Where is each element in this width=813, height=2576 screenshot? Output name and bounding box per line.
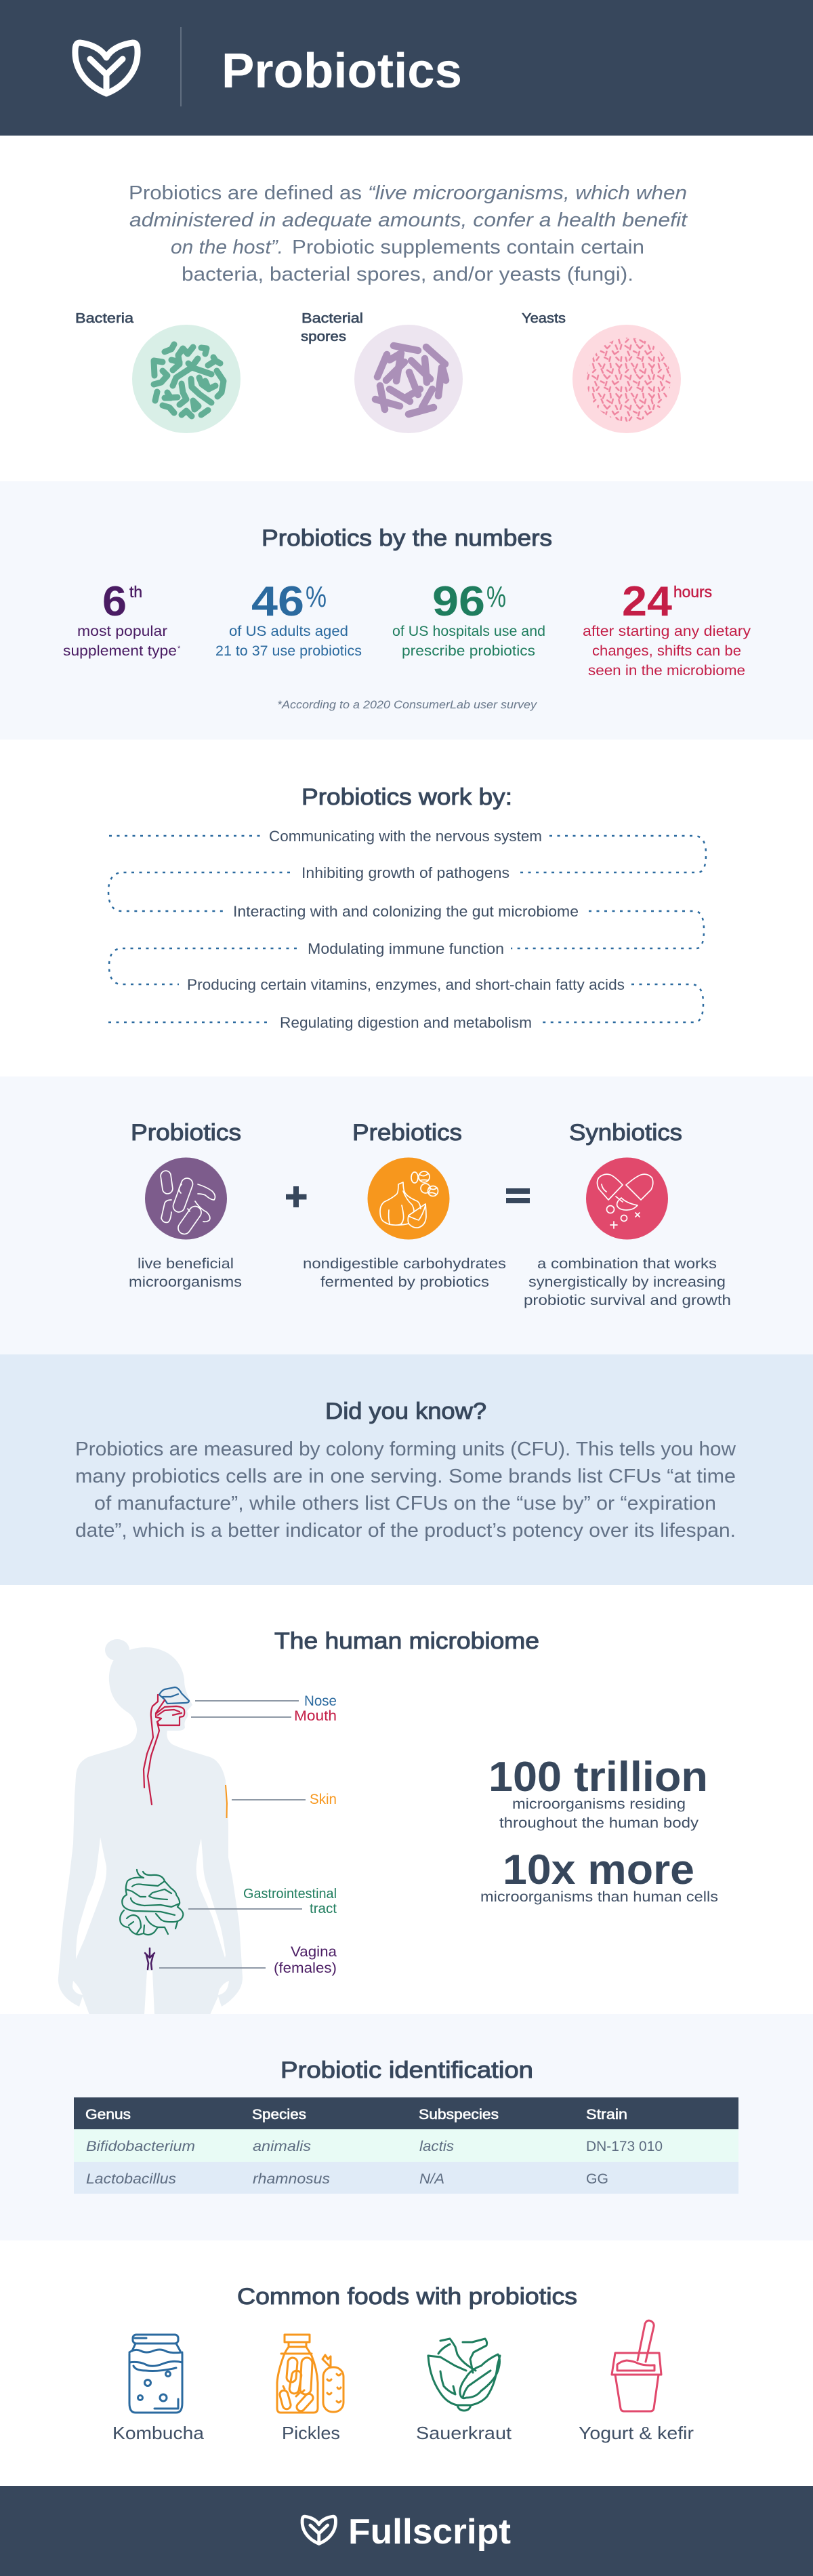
icon: bacterial spores circle	[354, 325, 463, 433]
table row: Bifidobacterium: animalis	[253, 2139, 312, 2154]
panel: header banner	[0, 0, 813, 136]
stat: 46%: 21 to 37 use probiotics	[215, 643, 362, 659]
stat: 46%: 46	[251, 578, 304, 625]
body silhouette	[58, 1639, 243, 2015]
leader: vagina: Vagina	[291, 1944, 337, 1960]
organ: skin marker	[226, 1785, 227, 1818]
label: bacterial spores: Bacterial	[301, 311, 363, 326]
stat: 6th: most popular	[77, 624, 167, 639]
label: bacteria: Bacteria	[75, 311, 134, 326]
stat: 6th: *	[178, 645, 181, 653]
mechanism: vitamins, enzymes, acids: Producing certain vitamins, enzymes, and short-chain fatty acids	[187, 976, 625, 993]
food: pickles	[277, 2335, 343, 2443]
stat: 100 trillion: 100 trillion	[488, 1754, 708, 1800]
stat: 10x more: microorganisms than human cells	[480, 1889, 718, 1905]
organ: mouth and esophagus	[144, 1695, 184, 1805]
stat: 24 hours: 24	[622, 578, 673, 625]
text block: definition: Probiotics are defined as	[129, 182, 362, 204]
food: sauerkraut	[416, 2339, 512, 2443]
stat: 100 trillion	[488, 1754, 708, 1831]
leader: skin: Skin	[310, 1792, 337, 1807]
icon: bacteria circle	[132, 325, 241, 433]
food: yogurt and kefir	[579, 2320, 694, 2443]
organ: nose	[159, 1687, 189, 1704]
stat: 6th: supplement type	[63, 643, 177, 659]
panel: footer	[0, 2486, 813, 2576]
table row: Lactobacillus: N/A	[419, 2171, 444, 2187]
heading: Synbiotics	[569, 1120, 682, 1146]
panel: probiotics plus prebiotics equals synbiotics	[0, 1076, 813, 1354]
stat: 96%: 96	[432, 578, 485, 625]
table row: Lactobacillus: Lactobacillus	[86, 2171, 177, 2187]
label: Pickles	[282, 2423, 340, 2443]
icon: bacteria in purple circle	[145, 1158, 227, 1239]
table header row: Subspecies	[419, 2107, 499, 2122]
icon: yeasts circle	[572, 325, 681, 433]
mechanism: gut microbiome: Interacting with and colonizing the gut microbiome	[233, 903, 579, 920]
icon: plus sign	[286, 1186, 306, 1207]
leader: nose: Nose	[304, 1693, 337, 1709]
description: a combination that works	[537, 1256, 717, 1272]
column: probiotics: microorganisms	[129, 1274, 242, 1290]
stat: 24 hours: after starting any dietary	[583, 624, 751, 639]
stat: 10x more: 10x more	[503, 1847, 694, 1893]
panel: probiotic identification	[0, 2014, 813, 2240]
table header row: Strain	[586, 2107, 627, 2122]
text block: CFU explanation	[75, 1438, 736, 1542]
panel: the human microbiome	[0, 1585, 813, 2015]
text block: definition: bacteria, bacterial spores, and/or yeasts (fungi).	[182, 264, 633, 285]
heading: Probiotics work by:	[301, 784, 512, 810]
divider line	[180, 27, 182, 106]
text block: CFU explanation: of manufacture”, while others list CFUs on the “use by” or “expiration	[94, 1493, 716, 1514]
column: prebiotics	[303, 1120, 506, 1290]
leader: gastrointestinal tract: Gastrointestinal	[243, 1887, 337, 1901]
column: prebiotics: fermented by probiotics	[320, 1274, 489, 1290]
stat: 24 hours: changes, shifts can be	[592, 643, 741, 659]
footnote: *According to a 2020 ConsumerLab user survey	[277, 698, 538, 711]
organ: vagina	[145, 1948, 154, 1969]
wordmark: Fullscript	[348, 2512, 511, 2552]
table	[74, 2097, 738, 2194]
table row: Lactobacillus	[86, 2171, 608, 2187]
label: bacterial spores: spores	[301, 329, 346, 344]
stat: 6th: th	[129, 583, 142, 601]
stat: 46%	[215, 578, 362, 659]
stat: 46%: %	[306, 580, 327, 613]
icon: equals sign	[506, 1188, 530, 1203]
column: probiotics	[129, 1120, 242, 1290]
mechanism: digestion and metabolism: Regulating digestion and metabolism	[280, 1014, 532, 1031]
heading: Common foods with probiotics	[237, 2284, 577, 2310]
text block: definition: Probiotic supplements contain certain	[292, 237, 644, 258]
stat: 96%	[392, 578, 545, 659]
label: Yogurt & kefir	[579, 2423, 694, 2443]
table row: Bifidobacterium: DN-173 010	[586, 2139, 663, 2154]
stat: 96%: prescribe probiotics	[402, 643, 535, 659]
food: kombucha	[112, 2335, 205, 2443]
icon: yogurt cup with spoon	[612, 2320, 661, 2411]
icon: jar	[129, 2335, 182, 2413]
stat: 96%: of US hospitals use and	[392, 624, 545, 639]
stat: 46%: of US adults aged	[229, 624, 348, 639]
label: Sauerkraut	[416, 2423, 512, 2443]
table row: Lactobacillus: GG	[586, 2171, 608, 2187]
table header row: Genus	[85, 2107, 131, 2122]
mechanism: nervous system: Communicating with the nervous system	[269, 828, 542, 845]
title: Probiotics	[222, 44, 462, 98]
stat: 10x more	[480, 1847, 718, 1905]
icon: Fullscript leaf logo	[75, 43, 138, 94]
table header row: Species	[252, 2107, 306, 2122]
panel: probiotics by the numbers	[0, 481, 813, 740]
panel: common foods with probiotics	[0, 2240, 813, 2486]
column: synbiotics	[524, 1120, 731, 1308]
label: Kombucha	[112, 2423, 205, 2443]
leader: vagina	[159, 1944, 337, 1976]
heading: Prebiotics	[352, 1120, 462, 1146]
mechanism: pathogens: Inhibiting growth of pathogens	[301, 864, 509, 881]
stat: 6th: 6	[102, 578, 127, 625]
organ: gastrointestinal tract	[120, 1870, 183, 1935]
leader: mouth: Mouth	[294, 1708, 337, 1724]
table header row	[85, 2107, 627, 2122]
heading: Did you know?	[325, 1398, 486, 1424]
stat: 24 hours: seen in the microbiome	[588, 663, 745, 679]
icon: garlic in orange circle	[367, 1158, 450, 1239]
table row: Bifidobacterium: Bifidobacterium	[86, 2139, 195, 2154]
panel: definition intro	[0, 136, 813, 481]
table row: Lactobacillus: rhamnosus	[253, 2171, 331, 2187]
table row: Bifidobacterium	[86, 2139, 663, 2154]
panel: probiotics work by	[0, 740, 813, 1076]
leader: vagina: (females)	[274, 1960, 337, 1976]
mechanism: immune function: Modulating immune function	[308, 940, 504, 957]
table row: Bifidobacterium: lactis	[419, 2139, 455, 2154]
text block: CFU explanation: many probiotics cells are in one serving. Some brands list CFUs “at time	[75, 1466, 736, 1487]
heading: The human microbiome	[274, 1628, 539, 1654]
stat: 96%: %	[486, 580, 506, 613]
dotted connector path	[108, 836, 706, 1022]
icon: Fullscript logo	[302, 2516, 335, 2543]
description: nondigestible carbohydrates	[303, 1256, 506, 1272]
leader: gastrointestinal tract: tract	[310, 1901, 337, 1916]
text block: definition: administered in adequate amounts, confer a health benefit	[129, 209, 688, 231]
stat: 100 trillion: throughout the human body	[499, 1815, 699, 1831]
text block: definition: “live microorganisms, which when	[368, 182, 687, 204]
description: live beneficial	[138, 1256, 234, 1272]
stat: 24 hours	[583, 578, 751, 679]
label: yeasts: Yeasts	[522, 311, 566, 326]
column: synbiotics: probiotic survival and growth	[524, 1293, 731, 1308]
icon: capsule and leaf in pink circle	[586, 1158, 668, 1239]
heading: Probiotics by the numbers	[262, 525, 552, 551]
panel: did you know	[0, 1354, 813, 1585]
stat: 6th	[63, 578, 181, 659]
label: bacterial spores	[301, 311, 363, 344]
text block: definition	[129, 182, 688, 285]
column: synbiotics: synergistically by increasing	[528, 1274, 726, 1290]
leader: gastrointestinal tract	[188, 1887, 337, 1916]
icon: pickle bottle and cucumber	[277, 2335, 343, 2413]
stat: 24 hours: hours	[673, 583, 712, 601]
heading: Probiotic identification	[280, 2057, 533, 2083]
stat: 100 trillion: microorganisms residing	[512, 1796, 686, 1812]
heading: Probiotics	[131, 1120, 241, 1146]
text block: definition: on the host”.	[171, 237, 283, 258]
text block: CFU explanation: Probiotics are measured by colony forming units (CFU). This tells you how	[75, 1438, 736, 1460]
icon: cabbage	[428, 2339, 500, 2411]
text block: CFU explanation: date”, which is a better indicator of the product’s potency over its lifespan.	[75, 1520, 736, 1542]
